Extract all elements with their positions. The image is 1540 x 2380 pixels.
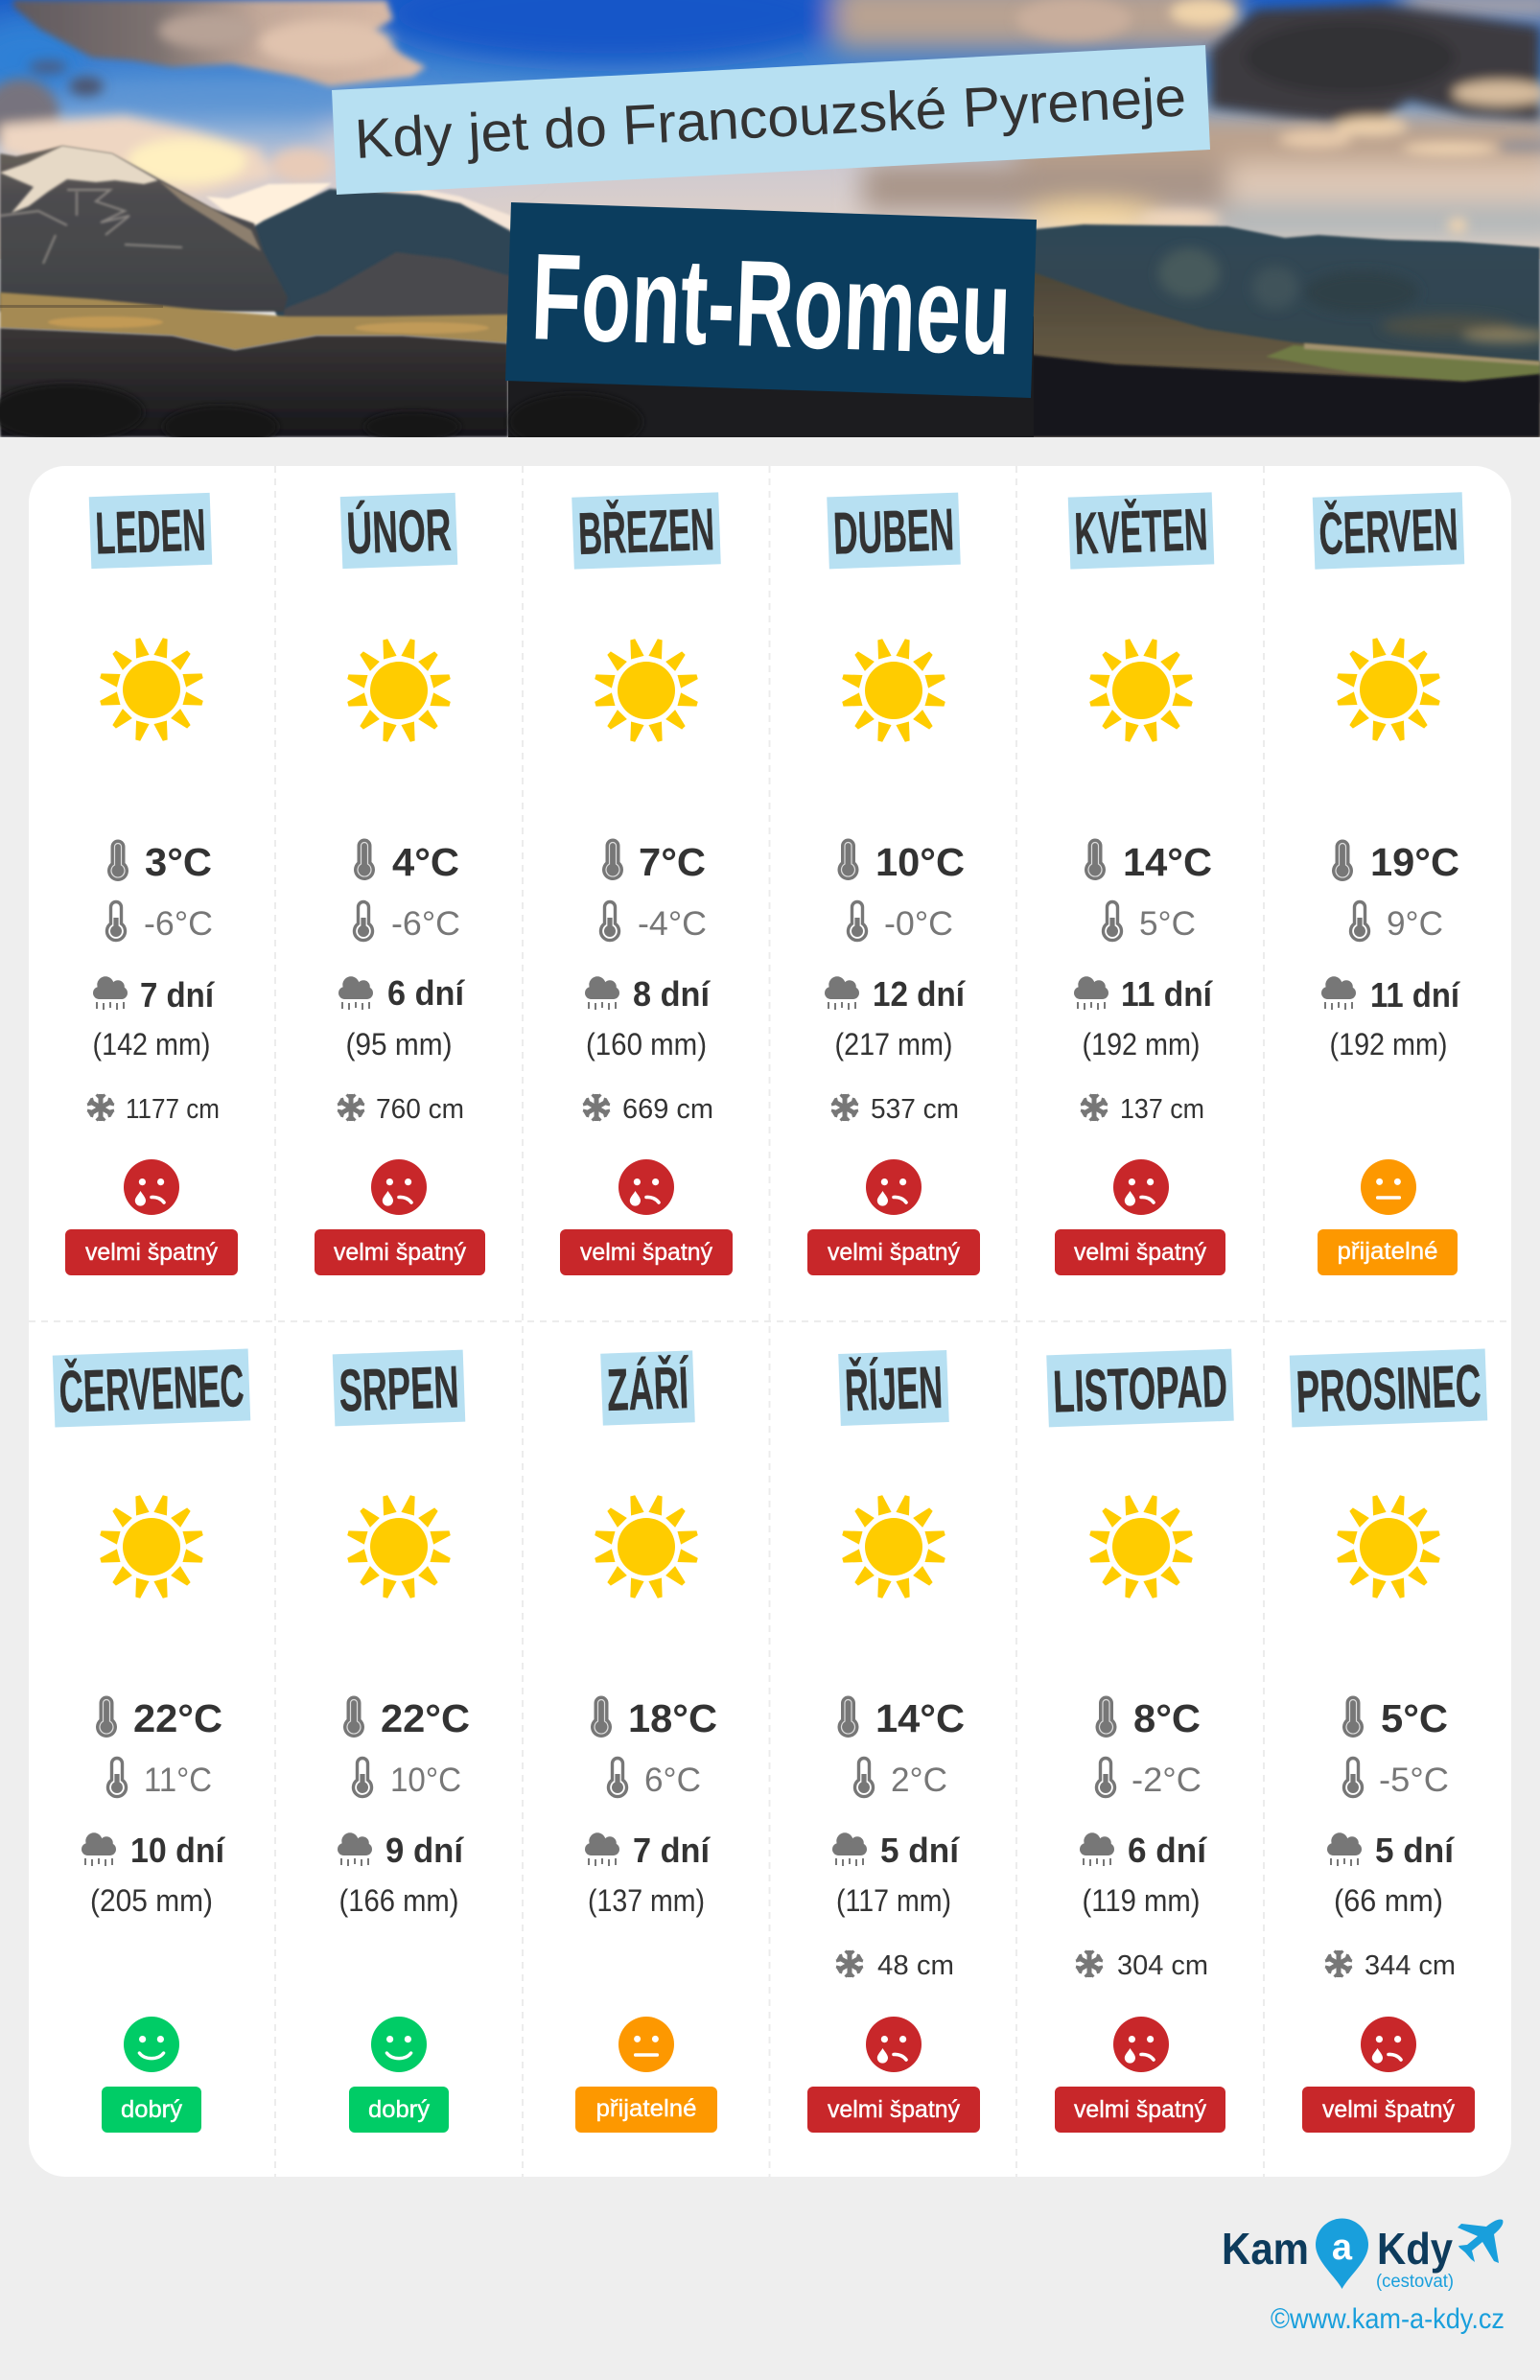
low temperature: 11°C — [144, 1762, 212, 1799]
rain days — [832, 1831, 960, 1870]
high temperature: 18°C — [628, 1696, 717, 1740]
snow — [1081, 1094, 1204, 1125]
low temperature — [608, 1759, 701, 1799]
month label — [333, 1350, 465, 1426]
panel: únor — [315, 493, 485, 1275]
high temperature — [1332, 840, 1459, 884]
rain days: 11 dní — [1370, 975, 1460, 1015]
precipitation: (95 mm) — [345, 1027, 453, 1062]
low temperature: -2°C — [1132, 1762, 1202, 1799]
icon: sun — [841, 1494, 946, 1599]
rain days — [825, 974, 966, 1014]
month label — [340, 493, 457, 569]
rating badge — [807, 1229, 980, 1275]
rating badge: velmi špatný — [1074, 2096, 1206, 2123]
rain days: 6 dní — [387, 973, 465, 1013]
rating badge: velmi špatný — [828, 1239, 960, 1266]
rating face — [618, 1159, 674, 1215]
icon: sun — [594, 638, 699, 743]
high temperature: 19°C — [1370, 840, 1459, 884]
rating badge: velmi špatný — [1074, 1239, 1206, 1266]
panel: květen — [1055, 492, 1225, 1275]
rating badge: velmi špatný — [580, 1239, 712, 1266]
month label — [600, 1350, 695, 1426]
rain days: 7 dní — [140, 975, 215, 1015]
distant snowy ridge — [206, 183, 332, 226]
rating badge: velmi špatný — [1322, 2096, 1455, 2123]
rating badge: dobrý — [121, 2096, 183, 2123]
snow — [1325, 1950, 1456, 1981]
rating face — [866, 2017, 922, 2072]
month label — [827, 493, 961, 569]
high temperature: 3°C — [145, 840, 212, 884]
snow — [87, 1094, 220, 1125]
icon: airplane — [1458, 2219, 1503, 2263]
panel: červenec — [53, 1348, 250, 2133]
subtitle text: Kdy jet do Francouzské Pyreneje — [353, 65, 1188, 171]
high temperature — [1085, 838, 1212, 884]
icon: sun — [99, 1494, 204, 1599]
rating face — [866, 1159, 922, 1215]
rain days: 5 dní — [880, 1831, 960, 1870]
low temperature — [353, 1759, 461, 1799]
rating badge: velmi špatný — [828, 2096, 960, 2123]
icon: sun — [1088, 638, 1194, 743]
low temperature: 10°C — [390, 1762, 461, 1799]
low temperature: -5°C — [1379, 1762, 1449, 1799]
month label: SRPEN — [338, 1354, 460, 1425]
rating badge: přijatelné — [596, 2095, 696, 2122]
rating face — [124, 1159, 179, 1215]
snow: 137 cm — [1120, 1094, 1204, 1125]
rating face — [1113, 2017, 1169, 2072]
precipitation: (166 mm) — [339, 1883, 458, 1918]
month label — [1046, 1349, 1234, 1427]
snow: 304 cm — [1117, 1950, 1208, 1981]
rating face — [124, 2017, 179, 2072]
precipitation: (137 mm) — [588, 1883, 705, 1918]
month label: ÚNOR — [345, 498, 453, 567]
month label — [572, 492, 721, 570]
low temperature — [107, 901, 213, 943]
icon: sun — [1336, 637, 1441, 742]
rating badge: přijatelné — [1337, 1238, 1438, 1265]
snow — [583, 1094, 713, 1125]
rating face — [371, 2017, 427, 2072]
rain days — [93, 975, 215, 1015]
month label: BŘEZEN — [577, 497, 715, 568]
low temperature: 6°C — [644, 1762, 701, 1799]
icon: sun — [1088, 1494, 1194, 1599]
snow — [836, 1950, 954, 1981]
month label: KVĚTEN — [1073, 497, 1209, 568]
precipitation: (117 mm) — [836, 1883, 951, 1918]
rain days — [338, 1831, 464, 1870]
snow: 669 cm — [622, 1094, 713, 1125]
low temperature: 9°C — [1387, 905, 1443, 943]
icon: sun — [841, 638, 946, 743]
subtitle banner — [332, 45, 1210, 195]
left peak — [0, 146, 288, 312]
month label: LISTOPAD — [1052, 1353, 1228, 1426]
website url: ©www.kam-a-kdy.cz — [1271, 2303, 1505, 2335]
month label — [53, 1348, 250, 1428]
rain days: 12 dní — [873, 974, 966, 1014]
rain days: 9 dní — [385, 1831, 464, 1870]
panel: srpen — [333, 1350, 470, 2133]
panel: březen — [560, 492, 733, 1275]
panel: leden — [65, 493, 238, 1275]
logo tagline: (cestovat) — [1376, 2272, 1454, 2292]
high temperature: 14°C — [1123, 840, 1212, 884]
high temperature — [602, 838, 706, 884]
high temperature: 4°C — [392, 840, 459, 884]
high temperature: 22°C — [133, 1696, 222, 1740]
month label: ZÁŘÍ — [606, 1355, 690, 1424]
logo word Kdy: Kdy — [1377, 2224, 1453, 2274]
month label: ČERVENEC — [58, 1353, 245, 1426]
calendar panel — [29, 466, 1511, 2177]
icon: map pin — [1316, 2219, 1368, 2289]
low temperature — [107, 1759, 212, 1799]
panel: září — [575, 1350, 717, 2133]
logo: Kam a Kdy — [1222, 2219, 1503, 2292]
rating badge — [65, 1229, 238, 1275]
rating badge — [1055, 2087, 1225, 2133]
rating face — [1113, 1159, 1169, 1215]
precipitation: (66 mm) — [1334, 1883, 1443, 1918]
high temperature — [838, 838, 965, 884]
logo word Kam: Kam — [1222, 2224, 1309, 2274]
rain days — [1080, 1831, 1207, 1870]
high temperature: 7°C — [639, 840, 706, 884]
month label — [1313, 492, 1464, 570]
snow — [1076, 1950, 1208, 1981]
rating badge — [575, 2087, 717, 2133]
rating badge — [1302, 2087, 1475, 2133]
high temperature — [591, 1695, 717, 1740]
high temperature: 14°C — [875, 1696, 965, 1740]
rain days — [338, 973, 465, 1013]
icon: map pin: a — [1332, 2228, 1353, 2268]
low temperature: 2°C — [891, 1762, 947, 1799]
shadowed foreground — [0, 328, 508, 437]
rain days — [585, 974, 711, 1014]
rain days: 8 dní — [633, 974, 711, 1014]
rating badge — [1055, 1229, 1225, 1275]
panel: prosinec — [1290, 1348, 1487, 2133]
high temperature: 5°C — [1381, 1696, 1448, 1740]
rating badge — [560, 1229, 733, 1275]
high temperature — [1342, 1695, 1448, 1740]
month label — [1068, 492, 1214, 570]
rain days — [1327, 1831, 1455, 1870]
rating face — [1361, 2017, 1416, 2072]
rating face — [371, 1159, 427, 1215]
precipitation: (192 mm) — [1329, 1027, 1448, 1062]
high temperature — [1095, 1695, 1201, 1740]
high temperature — [107, 840, 212, 884]
low temperature — [355, 901, 460, 943]
rating badge — [1318, 1229, 1458, 1275]
icon: sun — [99, 637, 204, 742]
month label: LEDEN — [94, 498, 207, 567]
high temperature — [96, 1695, 222, 1740]
precipitation: (205 mm) — [90, 1883, 213, 1918]
high temperature: 10°C — [875, 840, 965, 884]
high temperature: 8°C — [1133, 1696, 1201, 1740]
icon: sun — [346, 638, 452, 743]
icon: sun — [594, 1494, 699, 1599]
month label: DUBEN — [832, 497, 955, 568]
rain days: 11 dní — [1121, 974, 1213, 1014]
rating face — [1361, 1159, 1416, 1215]
month label: ŘÍJEN — [844, 1355, 944, 1424]
title banner — [505, 202, 1037, 398]
rain days — [1321, 975, 1460, 1015]
rating badge: velmi špatný — [334, 1239, 466, 1266]
month label — [838, 1350, 949, 1426]
low temperature — [600, 901, 707, 943]
precipitation: (217 mm) — [834, 1027, 953, 1062]
rain days — [82, 1831, 225, 1870]
panel: říjen — [807, 1350, 980, 2133]
icon: sun — [1336, 1494, 1441, 1599]
rating face — [618, 2017, 674, 2072]
snow: 48 cm — [877, 1950, 954, 1981]
rain days: 10 dní — [130, 1831, 225, 1870]
snow: 344 cm — [1365, 1950, 1456, 1981]
low temperature — [848, 901, 953, 943]
panel: červen — [1313, 492, 1464, 1275]
rain days — [1074, 974, 1213, 1014]
low temperature: -0°C — [884, 905, 953, 943]
low temperature: 5°C — [1139, 905, 1196, 943]
low temperature — [1097, 1759, 1202, 1799]
icon: sun — [346, 1494, 452, 1599]
low temperature — [1103, 901, 1196, 943]
rating badge: velmi špatný — [85, 1239, 218, 1266]
rating badge — [807, 2087, 980, 2133]
snow — [831, 1094, 959, 1125]
second peak — [251, 189, 518, 321]
snow: 537 cm — [871, 1094, 959, 1125]
rain days — [585, 1831, 711, 1870]
precipitation: (192 mm) — [1082, 1027, 1201, 1062]
rating badge — [102, 2087, 201, 2133]
low temperature: -6°C — [144, 905, 213, 943]
snow — [338, 1094, 464, 1125]
header photo: Pyrenees mountains under cloudy sky — [0, 0, 1540, 451]
high temperature — [343, 1695, 470, 1740]
precipitation: (142 mm) — [92, 1027, 211, 1062]
month label — [89, 493, 212, 569]
high temperature — [838, 1695, 965, 1740]
snow: 760 cm — [376, 1094, 464, 1125]
snow: 1177 cm — [126, 1094, 220, 1125]
precipitation: (160 mm) — [586, 1027, 707, 1062]
panel: listopad — [1046, 1349, 1234, 2133]
title text: Font-Romeu — [529, 228, 1014, 382]
panel: duben — [807, 493, 980, 1275]
golden valley — [0, 292, 508, 350]
low temperature: -6°C — [391, 905, 460, 943]
precipitation: (119 mm) — [1082, 1883, 1201, 1918]
right foreground hill — [1031, 271, 1540, 437]
low temperature — [855, 1759, 947, 1799]
high temperature — [354, 838, 459, 884]
high temperature: 22°C — [381, 1696, 470, 1740]
rating badge — [349, 2087, 449, 2133]
rain days: 5 dní — [1375, 1831, 1455, 1870]
right ridge — [1026, 224, 1540, 403]
low temperature — [1344, 1759, 1449, 1799]
rain days: 7 dní — [633, 1831, 711, 1870]
low temperature — [1350, 901, 1443, 943]
rating badge: dobrý — [368, 2096, 431, 2123]
rating badge — [315, 1229, 485, 1275]
low temperature: -4°C — [638, 905, 707, 943]
rain days: 6 dní — [1128, 1831, 1207, 1870]
